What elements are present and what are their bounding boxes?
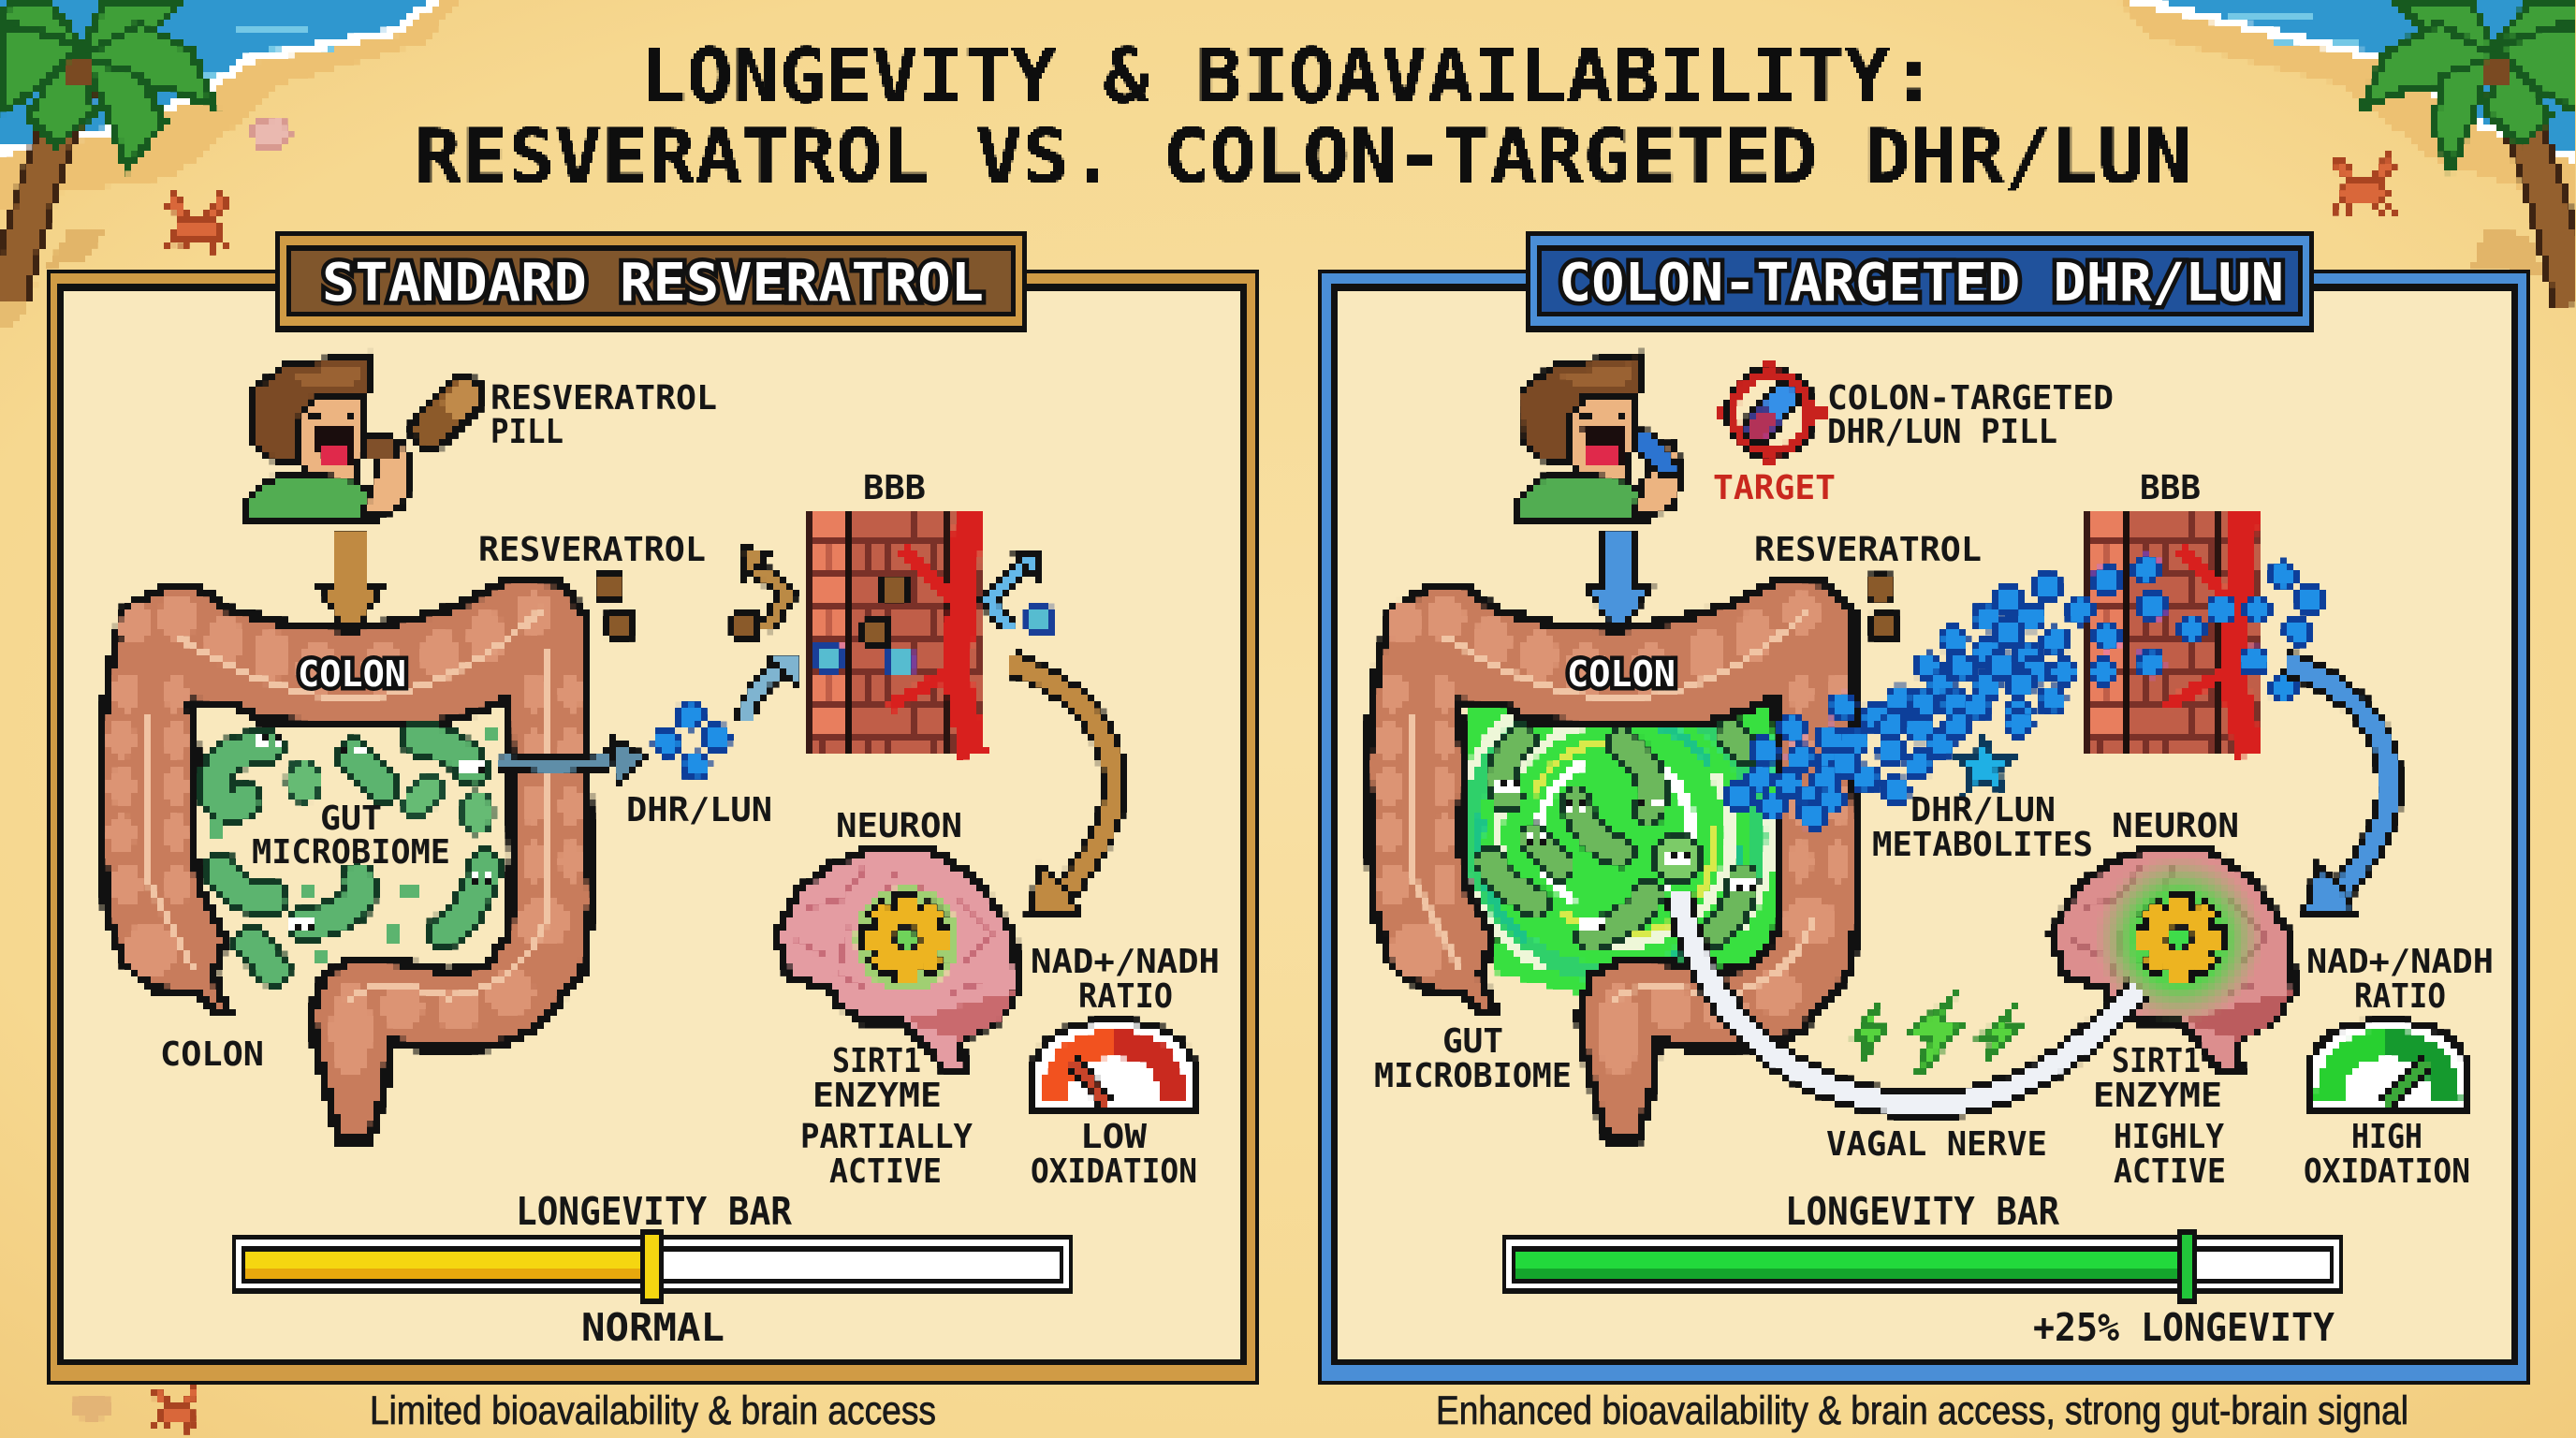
wet sand left: [0, 0, 459, 211]
icon: right palm tree: [2361, 0, 2576, 304]
label: NAD ratio: NAD+/NADH: [2306, 943, 2494, 981]
panel: standard resveratrol: [47, 231, 1259, 1385]
label: DHR/LUN: DHR/LUN: [626, 791, 772, 829]
label: low oxidation: [1031, 1118, 1197, 1191]
label: colon inside: COLON: [1567, 653, 1676, 695]
label: DHR/LUN metabolites: METABOLITES: [1872, 826, 2093, 864]
icon: blood brain barrier wall: [807, 510, 985, 756]
colon: [100, 580, 592, 1141]
label: colon-targeted pill: [1827, 379, 2114, 451]
caption: right: Enhanced bioavailability & brain access, strong gut-brain signal: [1436, 1388, 2408, 1433]
icon: lightning bolts: [1855, 990, 2018, 1077]
icon: target pill: [1717, 360, 1825, 465]
icon: left palm tree: [0, 0, 215, 300]
panel artwork: [1368, 354, 2472, 1141]
icon: resveratrol pill: [404, 370, 490, 456]
icon: blood brain barrier wall: [2083, 510, 2261, 756]
icon: crab bottom: [152, 1387, 200, 1431]
panel frame: [47, 270, 1259, 1385]
label: DHR/LUN metabolites: [1872, 791, 2093, 864]
microbiome swirl: [1415, 637, 1814, 1030]
label: partially active: ACTIVE: [829, 1152, 942, 1191]
label: SIRT1 enzyme: SIRT1: [2112, 1042, 2201, 1080]
label: resveratrol: RESVERATROL: [478, 531, 706, 569]
label: BBB: BBB: [2140, 469, 2201, 507]
label: SIRT1 enzyme: [2093, 1042, 2222, 1115]
icon: brain neuron: [776, 850, 1018, 1070]
label: high oxidation: OXIDATION: [2304, 1152, 2470, 1191]
icon: person taking pill: [246, 354, 412, 521]
text labels: [160, 379, 1220, 1350]
arrow: brown bounce back: [741, 547, 788, 629]
label: gut microbiome: MICROBIOME: [252, 833, 450, 872]
DHR/LUN molecules: [654, 702, 729, 779]
arrow: wall to neuron: [2286, 663, 2390, 917]
label: resveratrol pill: [490, 379, 717, 451]
gauge: high oxidation: [2304, 1018, 2472, 1111]
icon: crab left: [166, 192, 229, 252]
arrow: down to colon: [318, 532, 384, 638]
label: highly active: [2114, 1118, 2226, 1191]
panel heading: COLON-TARGETED DHR/LUN: [1559, 253, 2284, 314]
label: highly active: ACTIVE: [2114, 1152, 2226, 1191]
label: gut microbiome: GUT: [1442, 1022, 1503, 1061]
label: resveratrol pill: PILL: [490, 413, 564, 451]
label: SIRT1 enzyme: [812, 1042, 942, 1115]
arrow: wall to neuron: [1010, 663, 1114, 917]
gut bacteria: [212, 730, 496, 969]
panel artwork: [100, 354, 1200, 1141]
resveratrol molecules: [597, 575, 906, 645]
sand shadows: [47, 227, 108, 267]
foam left: [0, 0, 435, 152]
longevity bar: normal: [232, 1229, 1073, 1304]
resveratrol molecules: [1868, 576, 1896, 639]
label: neuron: NEURON: [2112, 807, 2239, 845]
label: high oxidation: HIGH: [2351, 1118, 2422, 1156]
title: LONGEVITY & BIOAVAILABILITY:: [640, 33, 1937, 120]
panel heading: STANDARD RESVERATROL: [322, 253, 984, 314]
panel frame: [1318, 270, 2530, 1385]
label: colon-targeted pill: COLON-TARGETED: [1827, 379, 2114, 418]
label: resveratrol: RESVERATROL: [1754, 531, 1982, 569]
label: longevity bar: LONGEVITY BAR: [1785, 1189, 2059, 1234]
water streaks left: [112, 28, 337, 108]
label: NAD ratio: [2306, 943, 2494, 1016]
text labels: [1374, 379, 2494, 1350]
label: low oxidation: LOW: [1080, 1118, 1147, 1156]
panel heading: [275, 231, 1027, 332]
arrow: down to colon: [1587, 532, 1652, 638]
label: SIRT1 enzyme: ENZYME: [812, 1077, 942, 1115]
icon: glowing brain neuron: [2052, 850, 2294, 1070]
sand smudge: [71, 1394, 112, 1420]
longevity bar: +25%: [1502, 1229, 2343, 1304]
title: RESVERATROL VS. COLON-TARGETED DHR/LUN: [415, 113, 2191, 200]
label: NAD ratio: [1031, 943, 1220, 1016]
label: target: TARGET: [1713, 469, 1836, 507]
label: gut microbiome: [252, 800, 450, 872]
label: vagal nerve: VAGAL NERVE: [1826, 1125, 2047, 1164]
wet sand right: [2117, 0, 2576, 206]
arrow: blue up to wall: [744, 656, 798, 721]
gauge: low oxidation: [1028, 1018, 1200, 1111]
label: NAD ratio: RATIO: [2354, 977, 2446, 1016]
foam right: [2133, 0, 2576, 159]
label: partially active: PARTIALLY: [800, 1118, 973, 1156]
icon: star: [1956, 736, 2012, 792]
water left: [0, 0, 435, 152]
label: DHR/LUN metabolites: DHR/LUN: [1910, 791, 2056, 829]
label: colon: COLON: [160, 1035, 264, 1074]
label: NAD ratio: NAD+/NADH: [1031, 943, 1220, 981]
arrow: blue bounce: [988, 554, 1039, 629]
icon: shell: [250, 118, 290, 148]
caption: left: Limited bioavailability & brain access: [370, 1388, 936, 1433]
panel: colon-targeted DHR/LUN: [1318, 231, 2530, 1385]
label: gut microbiome: [1374, 1022, 1572, 1095]
green bacteria: [1489, 735, 1755, 936]
label: BBB: BBB: [863, 469, 926, 507]
label: neuron: NEURON: [836, 807, 962, 845]
label: resveratrol pill: RESVERATROL: [490, 379, 717, 418]
metabolite molecule cloud: [1726, 556, 2323, 829]
label: partially active: [800, 1118, 973, 1191]
label: high oxidation: [2304, 1118, 2470, 1191]
label: colon-targeted pill: DHR/LUN PILL: [1827, 413, 2057, 451]
label: longevity bar: LONGEVITY BAR: [516, 1189, 792, 1234]
label: colon inside: COLON: [298, 653, 406, 695]
label: normal: NORMAL: [581, 1305, 724, 1350]
title: [415, 33, 2191, 200]
icon: crab right: [2332, 155, 2395, 215]
label: NAD ratio: RATIO: [1078, 977, 1173, 1016]
colon: [1368, 580, 1859, 1141]
vagal nerve: [1678, 893, 2139, 1105]
label: SIRT1 enzyme: SIRT1: [832, 1042, 921, 1080]
label: SIRT1 enzyme: ENZYME: [2093, 1077, 2222, 1115]
label: low oxidation: OXIDATION: [1031, 1152, 1197, 1191]
molecules in wall: [816, 608, 1052, 675]
label: gut microbiome: GUT: [320, 800, 382, 838]
panel heading: [1526, 231, 2314, 332]
icon: person taking pill: [1516, 354, 1682, 521]
water streaks right: [2228, 19, 2434, 80]
water right: [2133, 0, 2576, 159]
label: gut microbiome: MICROBIOME: [1374, 1057, 1572, 1095]
label: +25% longevity: +25% LONGEVITY: [2033, 1305, 2334, 1350]
label: highly active: HIGHLY: [2114, 1118, 2224, 1156]
arrow: out of colon: [501, 738, 645, 783]
